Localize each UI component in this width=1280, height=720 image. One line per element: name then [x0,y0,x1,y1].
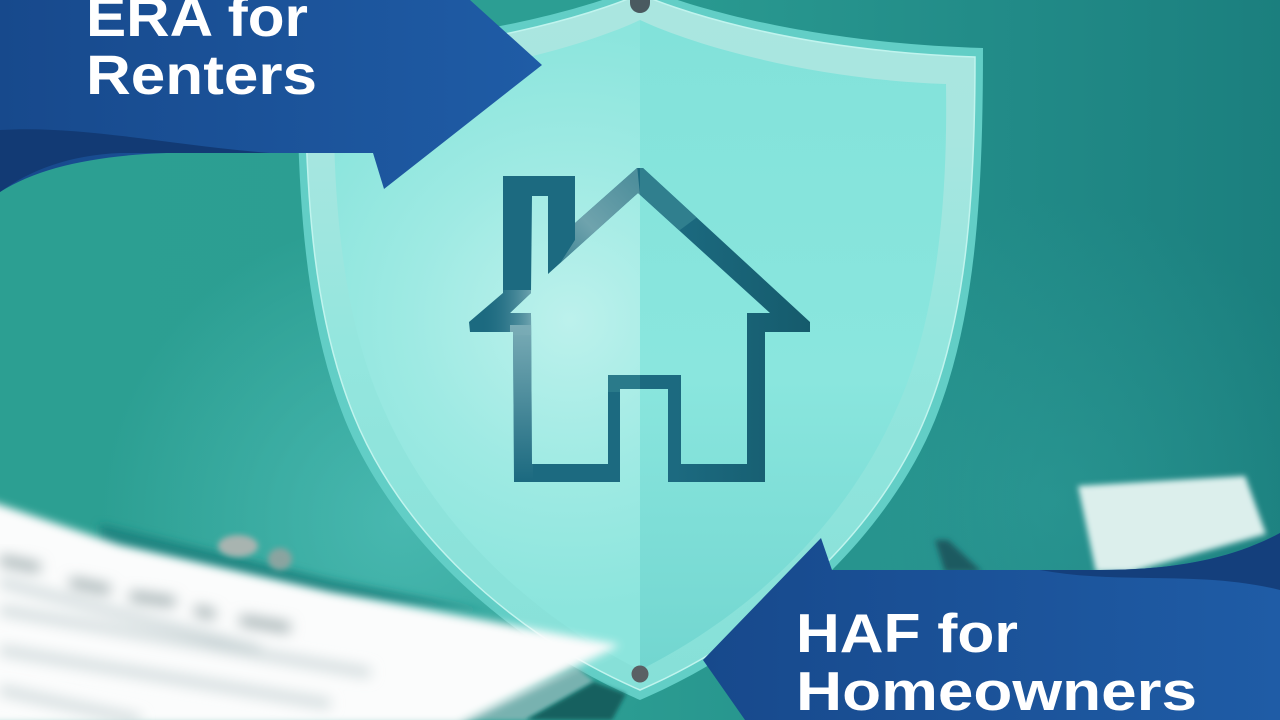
banner shadow [0,129,270,192]
arrow banner: ERA for Renters [0,0,542,192]
banner shadow [1040,533,1280,590]
arrow banner: HAF for Homeowners [703,533,1280,720]
icon: shield [297,0,983,700]
label: Renters: Renters [86,43,317,106]
paper: blurred document bottom left [0,498,620,720]
icon: bottom rivet [632,666,648,682]
paper shadow and clip [100,524,490,612]
pen blur right [935,540,982,572]
icon: top rivet [630,0,650,13]
icon: house [460,160,820,490]
document underside [452,668,626,720]
paper: blurred card right [1078,476,1266,572]
label: HAF for: HAF for [796,602,1018,664]
